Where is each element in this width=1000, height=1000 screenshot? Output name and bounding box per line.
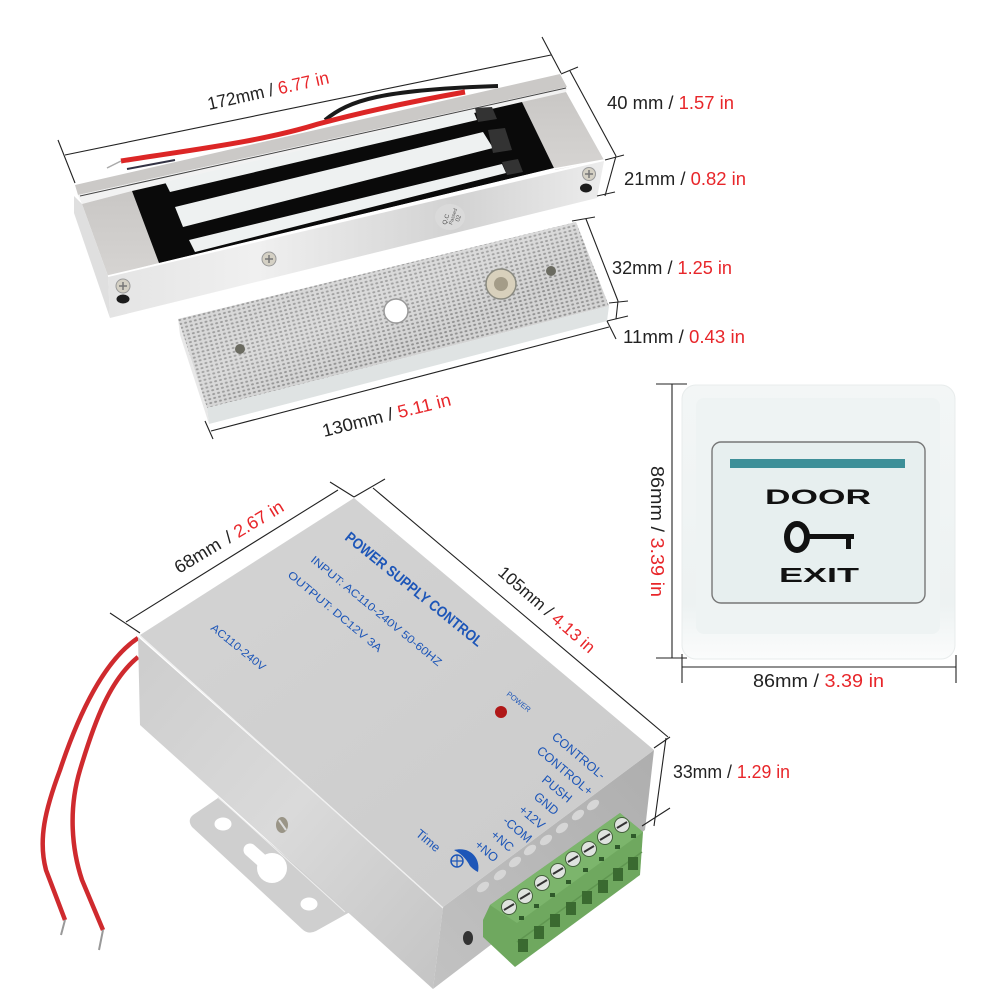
EXIT text: EXIT [779, 565, 859, 587]
label: 33mm: 33mm / 1.29 in [673, 762, 790, 782]
power wires [43, 638, 138, 950]
teal strip [730, 459, 905, 468]
indicator: power LED [495, 689, 533, 718]
left edge [178, 319, 209, 424]
label: 105mm: 105mm / 4.13 in [494, 563, 599, 657]
right end panel [522, 92, 604, 170]
label: 86mm vertical: 86mm / 3.39 in [647, 466, 667, 597]
red and black wires [107, 86, 498, 169]
label: 68mm: 68mm / 2.67 in [171, 496, 287, 577]
front strip [108, 161, 604, 318]
magnet bars [165, 107, 523, 252]
terminal labels: CONTROL+ [534, 744, 595, 798]
terminal labels: CONTROL- [549, 730, 608, 782]
indicator: power LED: POWER [505, 689, 533, 714]
stamp: QC passed: Q.C [442, 213, 451, 226]
mounting bracket [190, 798, 350, 933]
heading: power supply control: POWER SUPPLY CONTROL [341, 529, 486, 650]
left side [74, 196, 110, 318]
label: 130mm: 130mm / 5.11 in [320, 390, 453, 441]
dimension lines: magnetic lock [58, 37, 628, 439]
left side panel [138, 637, 443, 989]
label: 11mm: 11mm / 0.43 in [623, 327, 745, 347]
DOOR text: DOOR [765, 486, 871, 509]
vent spots [475, 798, 601, 894]
light band under strip [78, 87, 567, 204]
terminal labels: Time [413, 827, 443, 855]
text: AC input: AC110-240V [208, 622, 268, 674]
product: magnetic lock body [74, 74, 604, 318]
terminal labels: +12V [516, 803, 548, 833]
icon: time dial [451, 849, 478, 872]
label: 21mm: 21mm / 0.82 in [624, 169, 746, 189]
knurled face [178, 222, 609, 408]
small holes [235, 266, 556, 354]
left end panel [82, 191, 159, 276]
label: 40 mm: 40 mm / 1.57 in [607, 93, 734, 113]
dimension lines: door button [656, 384, 956, 683]
center bolt [486, 269, 516, 299]
magnet frame [132, 102, 554, 263]
terminal labels: PUSH [539, 773, 575, 806]
stamp: QC passed [435, 204, 465, 230]
label: 172mm: 172mm / 6.77 in [206, 68, 331, 114]
bracket screw [276, 817, 288, 833]
terminal block [483, 813, 643, 967]
product: armature plate [178, 222, 609, 424]
terminal labels: GND [531, 790, 561, 818]
text: input: INPUT: AC110-240V 50-60HZ [308, 554, 444, 669]
push button [712, 442, 925, 603]
top strip [75, 74, 567, 195]
center hole [384, 299, 408, 323]
screws and holes [116, 168, 596, 304]
side hole [463, 931, 473, 945]
stamp: QC passed: Passed [448, 208, 459, 226]
product: power supply [43, 498, 654, 989]
dimension lines: power supply [110, 479, 670, 826]
stamp: QC passed: 02 [455, 214, 463, 223]
terminal labels: -COM [500, 814, 535, 846]
label: 32mm: 32mm / 1.25 in [612, 258, 732, 278]
front edge [207, 306, 609, 424]
text: output: OUTPUT: DC12V 3A [285, 569, 385, 655]
terminal labels: +NO [472, 838, 501, 865]
wall plate [682, 385, 955, 659]
label: 86mm horizontal: 86mm / 3.39 in [753, 671, 884, 691]
front panel [433, 750, 654, 989]
terminal labels [413, 730, 608, 865]
icon: key [787, 524, 854, 550]
top panel [140, 498, 654, 907]
product: door exit button [682, 385, 955, 659]
terminal labels: +NC [488, 828, 516, 855]
